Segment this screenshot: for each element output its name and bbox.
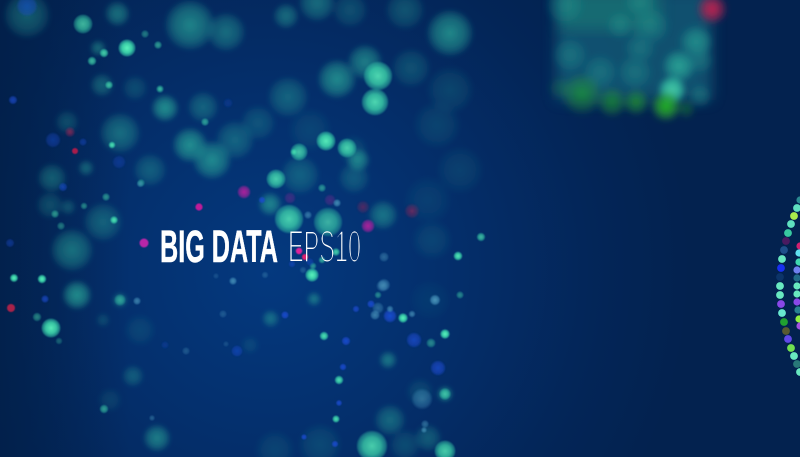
bokeh particles: large soft field — [3, 0, 484, 457]
bokeh particles: pale blue — [133, 180, 440, 433]
headline: BIG DATA EPS10 — [160, 221, 361, 272]
bokeh particles: blue — [6, 0, 446, 448]
cube of blurred dots, top right — [545, 0, 728, 122]
heading: EPS10: EPS10 — [288, 221, 361, 272]
bokeh particles: magenta and red — [7, 126, 420, 312]
bokeh particles: bright mint — [10, 14, 485, 457]
dotted rings, right edge — [776, 196, 800, 376]
heading: BIG DATA: BIG DATA — [160, 221, 278, 272]
